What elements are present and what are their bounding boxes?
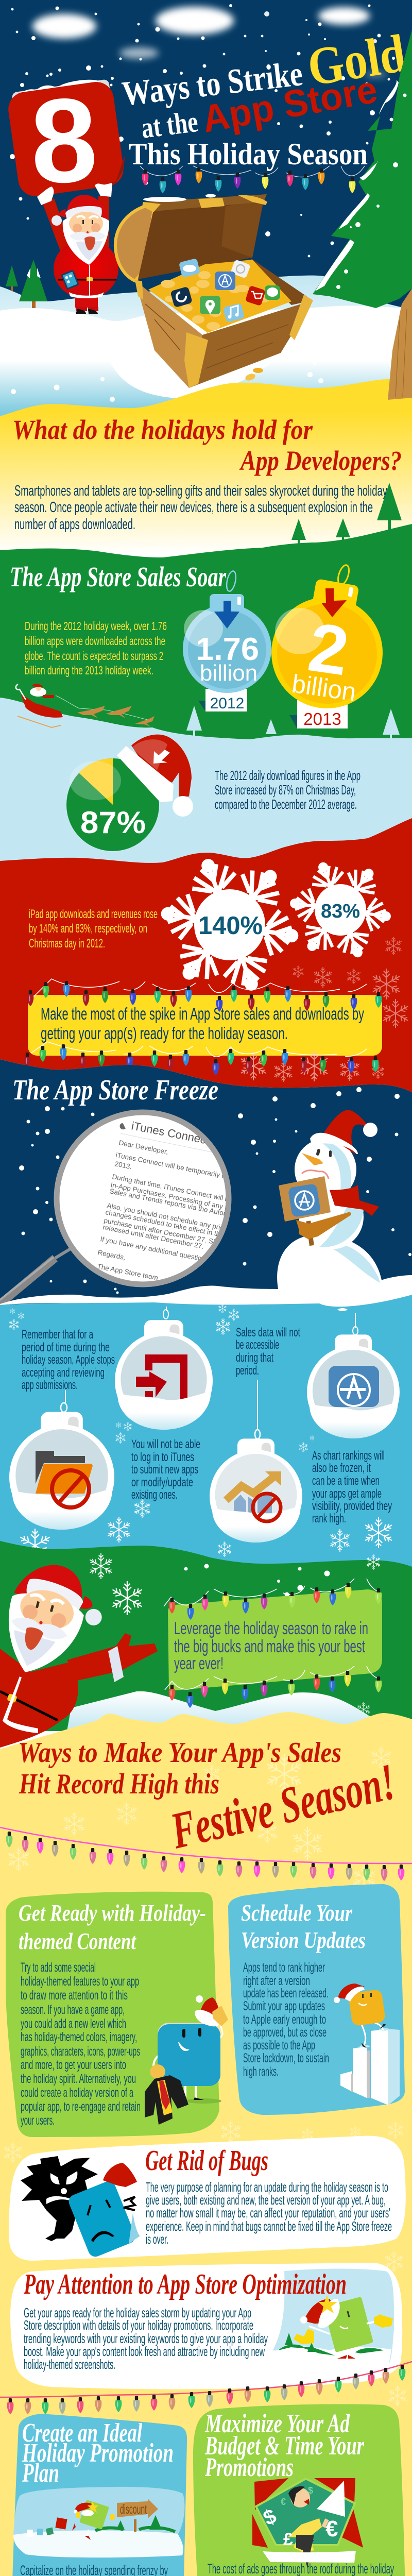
text block bbox=[25, 619, 167, 677]
panel: festive season cream background bbox=[0, 1712, 412, 2576]
illustration: snowy scene with green app bbox=[273, 2269, 394, 2365]
panel: schedule your version updates bbox=[228, 1884, 405, 2115]
text block: Submit your app updates bbox=[243, 1999, 325, 2013]
bauble: 2013 bbox=[271, 564, 383, 728]
panel: get rid of bugs bbox=[9, 2136, 406, 2261]
panel: ipad stats bbox=[0, 818, 412, 1092]
illustration: man with megaphone: £ bbox=[283, 2530, 293, 2549]
panel: the app store sales soar bbox=[0, 483, 412, 747]
text block: graphics, characters, icons, power-ups bbox=[21, 2044, 140, 2059]
coins bbox=[161, 271, 270, 330]
text block: could create a holiday version of a bbox=[21, 2086, 133, 2100]
email text: Also, you should not schedule any pricing changes bbox=[106, 1201, 261, 1239]
illustration: man with megaphone: € bbox=[281, 2497, 286, 2507]
illustration: man with megaphone bbox=[252, 2478, 363, 2568]
text block: log in: existing ones. bbox=[131, 1488, 178, 1502]
number 8: 8 bbox=[28, 73, 99, 209]
heading: Get Rid of Bugs bbox=[145, 2145, 268, 2177]
lights string: pink bbox=[0, 1827, 412, 1881]
clouds bbox=[32, 7, 387, 77]
email text: changes scheduled to take effect in that duration bbox=[105, 1208, 253, 1244]
heading: Version Updates bbox=[241, 1927, 366, 1953]
text block: log in: to log in to iTunes bbox=[131, 1450, 194, 1464]
email text: 2013. bbox=[114, 1160, 132, 1171]
panel: pay attention to app store optimization bbox=[10, 2263, 402, 2389]
icon: red app tile with number 8 bbox=[6, 73, 126, 209]
lights around callout bbox=[24, 979, 382, 1075]
icon: shivering snowman bbox=[277, 1110, 382, 1291]
ornament: chart blocked bbox=[210, 1380, 302, 1543]
text block: by 140% and 83%, respectively, on bbox=[29, 922, 147, 936]
heading bbox=[12, 414, 402, 476]
heading bbox=[18, 1737, 401, 1860]
email text: Dear Developer, bbox=[118, 1139, 169, 1156]
heading: The App Store Sales Soar bbox=[10, 561, 226, 592]
heading: themed Content bbox=[19, 1928, 136, 1954]
panel: get ready with holiday-themed content bbox=[6, 1892, 228, 2137]
snowy ground bbox=[0, 276, 412, 443]
snow dots bbox=[19, 1087, 411, 1294]
sign: discount: discount bbox=[120, 2501, 147, 2517]
heading bbox=[204, 2409, 365, 2482]
icon: treasure chest full of apps bbox=[115, 194, 313, 388]
text block bbox=[215, 768, 360, 812]
lights string: coral bbox=[0, 2362, 412, 2414]
text block: and more, to get your users into bbox=[21, 2058, 126, 2072]
email text: iTunes Connect will be temporarily unavailable from bbox=[115, 1151, 272, 1189]
heading: Holiday Promotion bbox=[22, 2438, 174, 2468]
text block: to Apple early enough to bbox=[243, 2012, 326, 2027]
icon: santa sleigh and reindeer bbox=[16, 684, 154, 727]
title: Ways to Strike bbox=[120, 54, 304, 113]
icon: big tree and trunk bbox=[313, 30, 412, 400]
bauble: 2012: billion bbox=[200, 660, 258, 686]
heading: Schedule Your bbox=[241, 1900, 353, 1926]
text block: log in: or modify/update bbox=[131, 1476, 193, 1489]
icon: pale trees bbox=[186, 706, 400, 740]
heading: Hit Record High this bbox=[19, 1768, 219, 1800]
icon: magnifying glass over email bbox=[0, 1110, 232, 1305]
callout: make the most bbox=[28, 995, 382, 1056]
text block bbox=[20, 2563, 178, 2576]
text block: Store lockdown, to sustain bbox=[243, 2051, 329, 2065]
text block: remember: Remember that for a bbox=[22, 1328, 93, 1342]
text block: you could add a new level which bbox=[21, 2016, 126, 2031]
chart: snowflake 140%: 140% bbox=[198, 912, 263, 940]
text block: sales data: period. bbox=[236, 1364, 259, 1378]
chart: snowflake 83% bbox=[273, 843, 408, 977]
text block: chart rankings: also be frozen, it bbox=[312, 1461, 371, 1475]
heading: Plan bbox=[22, 2459, 59, 2488]
email text: purchase until after December 27. Similarly, apps bbox=[103, 1216, 253, 1253]
text block bbox=[21, 1960, 141, 2128]
text block bbox=[146, 2179, 392, 2247]
year 2012: 2012 bbox=[210, 695, 244, 712]
heading: Create an Ideal bbox=[22, 2418, 142, 2448]
icon: small pine trees bbox=[6, 260, 47, 308]
lights string bbox=[164, 1579, 382, 1708]
text block: season. If you have a game app, bbox=[21, 2003, 125, 2017]
email text: The App Store team bbox=[96, 1262, 159, 1282]
panel: what do the holidays hold bbox=[0, 30, 412, 562]
text block: has holiday-themed colors, imagery, bbox=[21, 2030, 137, 2044]
text block: sales data: Sales data will not bbox=[236, 1326, 300, 1340]
text block bbox=[14, 483, 387, 533]
faded flakes bbox=[2, 1746, 409, 2576]
callout: leverage: year ever! bbox=[174, 1654, 224, 1673]
faded snowflakes lower bbox=[238, 1050, 385, 1082]
email text: If you have any additional questions, use the bbox=[99, 1235, 236, 1269]
text block: your users. bbox=[21, 2113, 55, 2128]
text block: to draw more attention to it this bbox=[21, 1988, 128, 2003]
text block: holiday-themed features to your app bbox=[21, 1974, 139, 1989]
title words: App Store: App Store bbox=[199, 67, 381, 141]
text block bbox=[243, 1960, 329, 2079]
spilled coins bbox=[253, 368, 263, 373]
text block: Apps tend to rank higher bbox=[243, 1960, 325, 1975]
snow dots bbox=[184, 1564, 330, 1597]
icon: yellow app climbing bars bbox=[334, 1984, 400, 2105]
text block: remember: holiday season, Apple stops bbox=[22, 1353, 115, 1367]
illustration: discount run bbox=[13, 2487, 184, 2557]
text block: log in bbox=[131, 1437, 200, 1502]
text block: log in: You will not be able bbox=[131, 1437, 200, 1451]
app icons bbox=[170, 258, 280, 323]
panel: the app store freeze bbox=[0, 1059, 412, 1319]
heading bbox=[22, 2418, 174, 2488]
text block: sales data: be accessible bbox=[236, 1338, 279, 1352]
icon: bug and sad app tile bbox=[21, 2156, 140, 2259]
faded snowflakes bbox=[292, 936, 410, 1028]
text block: globe. The count is expected to surpass 2 bbox=[25, 649, 163, 663]
bauble: 2012 bbox=[183, 570, 271, 712]
text block: iPad app downloads and revenues rose bbox=[29, 907, 158, 921]
text block: high ranks. bbox=[243, 2064, 279, 2079]
text block: sales data: during that bbox=[236, 1351, 273, 1365]
ornament: app store icon bbox=[307, 1313, 400, 1438]
text block: chart rankings bbox=[312, 1449, 392, 1526]
text block: remember: period of time during the bbox=[22, 1341, 110, 1354]
email text: Regards, bbox=[97, 1248, 126, 1261]
panel: leverage the holiday season bbox=[0, 1541, 412, 1731]
text block: chart rankings: rank high. bbox=[312, 1512, 346, 1526]
title: This Holiday Season bbox=[129, 137, 368, 171]
bauble: 2013: 2 bbox=[304, 608, 353, 690]
text block: remember bbox=[22, 1328, 115, 1392]
bauble: 2012: 1.76 bbox=[196, 632, 259, 667]
icon: hill trees bbox=[291, 483, 402, 545]
chart: 87% pie under santa hat bbox=[66, 735, 193, 851]
chart: snowflake 140% bbox=[139, 835, 321, 1015]
panel: maximize your ad budget bbox=[193, 2404, 406, 2576]
title: at the bbox=[140, 105, 200, 145]
text block bbox=[29, 907, 158, 951]
heading bbox=[19, 1900, 206, 1954]
text block: billion during the 2013 holiday week. bbox=[25, 664, 153, 677]
text block: update has been released. bbox=[243, 1986, 329, 2001]
snow drift bbox=[0, 1275, 412, 1307]
pie value: 87% bbox=[80, 805, 146, 840]
jacket and tie bbox=[145, 2075, 188, 2125]
flakes on green bbox=[88, 1553, 381, 1717]
text block: During the 2012 holiday week, over 1.76 bbox=[25, 619, 167, 633]
heading: Ways to Make Your App's Sales bbox=[18, 1737, 341, 1769]
year 2013: 2013 bbox=[303, 709, 341, 728]
callout: leverage bbox=[168, 1589, 382, 1690]
text block: holiday-themed screenshots. bbox=[24, 2357, 115, 2372]
illustration: man with megaphone: $ bbox=[308, 2485, 313, 2496]
panel: hero night scene bbox=[0, 0, 412, 443]
callout: make the most: getting your app(s) ready for the holiday season. bbox=[41, 1024, 288, 1043]
icon: blue app character with jacket bbox=[145, 1995, 228, 2125]
heading bbox=[241, 1900, 366, 1953]
decorative flakes bbox=[8, 1304, 394, 1564]
heading: Get Ready with Holiday- bbox=[19, 1900, 206, 1926]
sign with app store icon bbox=[279, 1176, 351, 1246]
text block: Try to add some special bbox=[21, 1960, 96, 1975]
heading: What do the holidays hold for bbox=[12, 414, 313, 445]
text block: be approved, but as close bbox=[243, 2025, 327, 2040]
text block: log in: to submit new apps bbox=[131, 1463, 198, 1477]
text block: Christmas day in 2012. bbox=[29, 937, 105, 951]
icon: tablet in hand bbox=[61, 269, 79, 290]
bauble: 2013: billion bbox=[290, 669, 358, 707]
title bbox=[120, 23, 409, 171]
text block: billion apps were downloaded across the bbox=[25, 634, 165, 648]
ornament: submissions icon bbox=[115, 1307, 213, 1430]
text block: as possible to the App bbox=[243, 2038, 315, 2053]
email text: iTunes Connect bbox=[130, 1119, 210, 1147]
sign: discount bbox=[117, 2499, 158, 2518]
heading: Maximize Your Ad bbox=[204, 2409, 350, 2438]
heading: The App Store Freeze bbox=[12, 1074, 218, 1106]
email text: In-App Purchases. Processing of any Newsstand content bbox=[110, 1181, 284, 1222]
email text: Sales and Trends reports via the Autoingestion tool bbox=[109, 1187, 264, 1225]
illustration: man with megaphone: € bbox=[325, 2516, 338, 2541]
text block: right after a version bbox=[243, 1974, 310, 1988]
decorative lights string under title bbox=[140, 166, 365, 193]
icon: santa holding the tile bbox=[37, 183, 118, 314]
text block bbox=[24, 2305, 268, 2372]
snow band bbox=[67, 1691, 373, 1731]
text block: is over. bbox=[146, 2231, 168, 2247]
text block: sales data bbox=[236, 1326, 300, 1378]
text block: number of apps downloaded. bbox=[14, 516, 135, 533]
chart: snowflake 83%: 83% bbox=[321, 901, 360, 922]
icon: big santa pointing at callout bbox=[0, 1556, 158, 1748]
snow dots bbox=[10, 4, 395, 402]
text block: popular app, to re-engage and retain bbox=[21, 2099, 141, 2114]
text block: remember: app submissions. bbox=[22, 1378, 78, 1392]
email text bbox=[98, 1121, 226, 1280]
panel: create an ideal holiday promotion plan bbox=[11, 2414, 187, 2576]
email text: During that time, iTunes Connect will not be available for bbox=[111, 1173, 284, 1213]
text block: the holiday spirit. Alternatively, you bbox=[21, 2072, 136, 2086]
heading: Promotions bbox=[204, 2453, 294, 2482]
panel: daily download bbox=[0, 684, 412, 876]
illustration: man with megaphone: $ bbox=[260, 2505, 280, 2530]
panel: ornaments on blue bbox=[0, 1291, 412, 1577]
email text: released until after December 27. bbox=[102, 1223, 204, 1250]
ornament: folder blocked bbox=[9, 1390, 114, 1530]
text block: remember: accepting and reviewing bbox=[22, 1366, 105, 1380]
snow streaks bbox=[273, 1291, 350, 1311]
